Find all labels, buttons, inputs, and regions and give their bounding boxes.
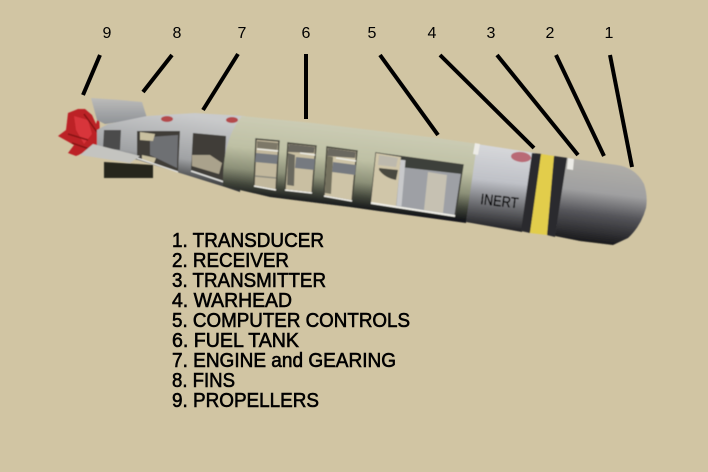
warhead red marker [511,151,531,163]
torpedo illustration [58,98,647,245]
lower fin [80,144,140,163]
black band [521,153,542,233]
number labels: 2 [546,25,555,42]
number labels: 7 [238,25,247,42]
yellow band [530,154,554,235]
leader lines [83,54,632,167]
parts legend: 9. PROPELLERS [172,390,319,412]
INERT label: INERT [480,191,519,212]
white tag marks [473,143,574,170]
parts legend: 8. FINS [172,370,235,392]
second black band [547,156,568,237]
silver warhead section [466,144,535,232]
number labels: 6 [302,25,311,42]
olive fuel tank section [223,116,478,223]
number labels: 4 [428,25,437,42]
red propellers [58,109,100,156]
number labels: 8 [173,25,182,42]
parts legend: 6. FUEL TANK [172,330,300,352]
parts legend: 3. TRANSMITTER [172,270,326,292]
number labels: 5 [368,25,377,42]
parts legend: 2. RECEIVER [172,250,289,272]
lower tail shadow block [104,162,153,178]
parts legend [172,230,410,412]
parts legend: 4. WARHEAD [172,290,292,312]
computer controls window [371,153,463,216]
red markers [161,116,238,123]
parts legend: 5. COMPUTER CONTROLS [172,310,410,332]
gearing bay opening [191,133,226,182]
propeller hub gear [103,130,121,150]
number labels: 3 [487,25,496,42]
fuel tank windows [254,139,357,201]
upper fin [91,98,147,124]
number labels: 1 [605,25,614,42]
nose section [555,158,647,245]
tail and engine section body [97,113,245,192]
parts legend: 1. TRANSDUCER [172,230,324,252]
parts legend: 7. ENGINE and GEARING [172,350,396,372]
number labels: 9 [103,25,112,42]
engine bay opening [137,131,180,172]
number labels [103,25,614,42]
